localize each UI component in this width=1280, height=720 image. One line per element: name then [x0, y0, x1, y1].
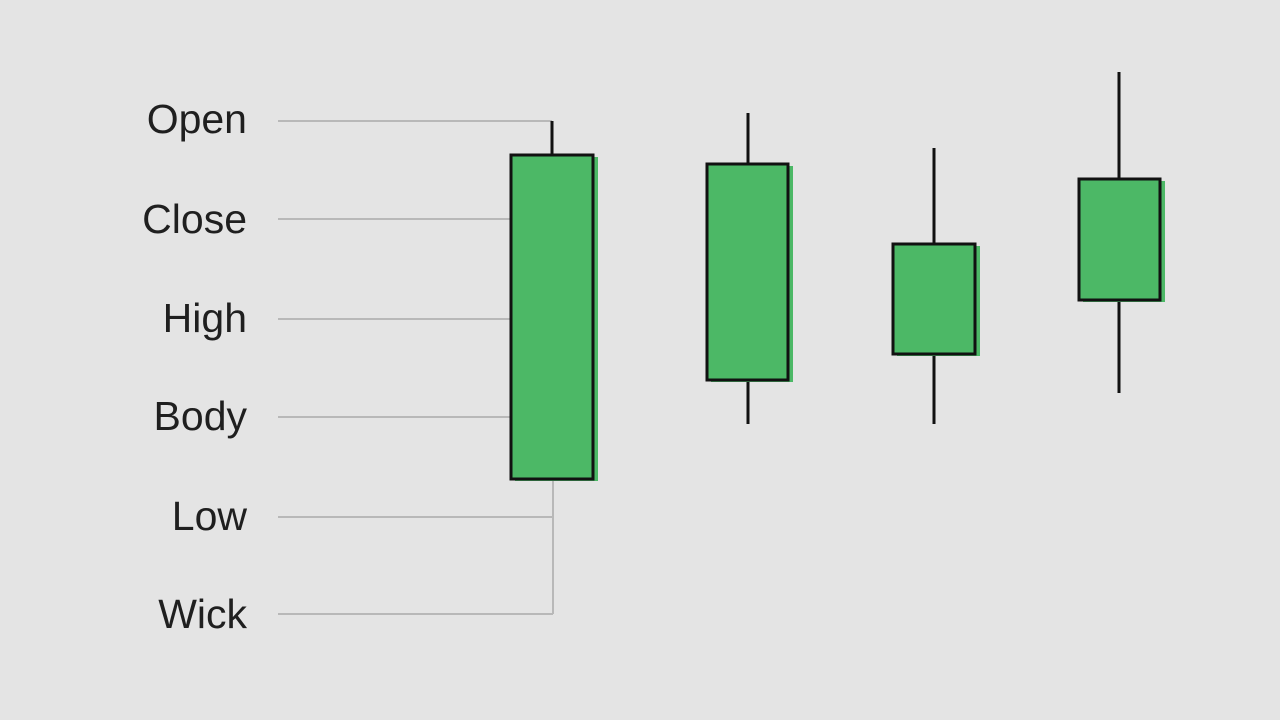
- label: High: High: [163, 295, 247, 341]
- candle 4: [1079, 72, 1165, 393]
- candle 2: [707, 113, 793, 424]
- candle 3: [893, 148, 980, 424]
- labels: [142, 96, 247, 637]
- leader lines: [278, 121, 553, 614]
- candle 1: [511, 121, 598, 481]
- label: Close: Close: [142, 196, 247, 242]
- label: Low: Low: [172, 493, 247, 539]
- label: Body: Body: [154, 393, 247, 439]
- label: Open: Open: [147, 96, 247, 142]
- label: Wick: Wick: [158, 591, 247, 637]
